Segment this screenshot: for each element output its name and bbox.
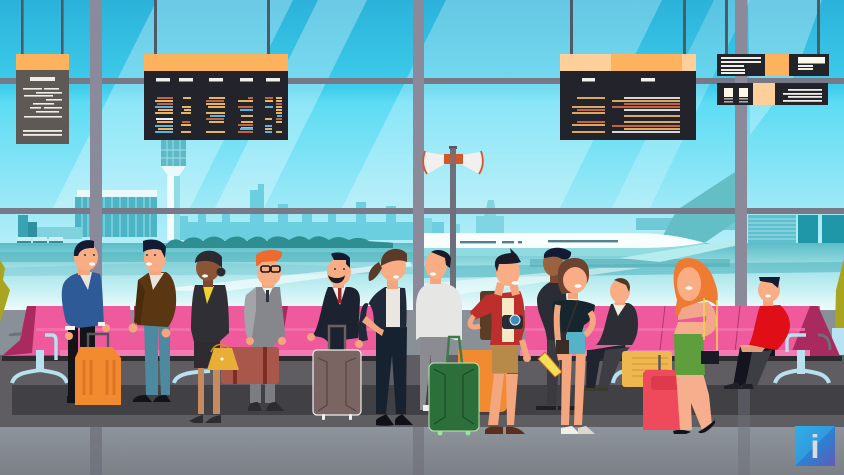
person: woman in teal top [553, 258, 595, 434]
suitcase: green [429, 337, 479, 436]
logo badge: i [810, 428, 820, 465]
loudspeaker on pole [423, 146, 483, 298]
suitcase: red [643, 355, 682, 430]
seating row: right [517, 306, 842, 383]
plant: right [832, 258, 844, 356]
person: woman in dark suit [189, 251, 229, 423]
sky through window [0, 0, 844, 245]
airport apron [0, 243, 844, 310]
row of trees [165, 236, 393, 248]
person: seated man in dark suit [584, 278, 638, 391]
suitcase: brown [221, 347, 279, 384]
flight board: departures left [144, 0, 288, 140]
handbag: yellow [207, 344, 239, 370]
seating row: left [2, 306, 378, 383]
floor [0, 355, 844, 475]
terminal building with blocks [17, 190, 157, 247]
person: woman with red hair [673, 258, 719, 434]
person: man in dark suit behind [536, 248, 575, 410]
person: man in blue jacket [62, 240, 110, 403]
person: seated man in red sweater [724, 277, 790, 389]
distant city skyline [172, 184, 504, 240]
suitcase: orange behind [458, 350, 507, 412]
suitcase: yellow [622, 351, 672, 387]
person: man in grey vest with orange hair [244, 250, 286, 411]
suitcase: grey-brown [313, 326, 361, 420]
plant: left [0, 260, 10, 322]
flight board: small upper right [717, 0, 829, 76]
flight board: small lower right [717, 83, 828, 105]
airplane [424, 172, 748, 267]
flight board: departures right [560, 0, 696, 140]
suitcase: orange [75, 334, 121, 405]
person: man in brown jacket [128, 239, 176, 402]
person: bearded man in suit [307, 253, 360, 354]
ticket in hand [538, 352, 562, 377]
window frame [0, 0, 844, 310]
flight board: small left [16, 0, 69, 144]
right terminal building [636, 215, 844, 247]
person: tourist with camera [470, 248, 531, 434]
logo badge [795, 426, 835, 466]
person: woman in dark suit with ponytail [355, 249, 413, 426]
control tower [161, 140, 186, 240]
person: man in white shirt [416, 250, 462, 411]
